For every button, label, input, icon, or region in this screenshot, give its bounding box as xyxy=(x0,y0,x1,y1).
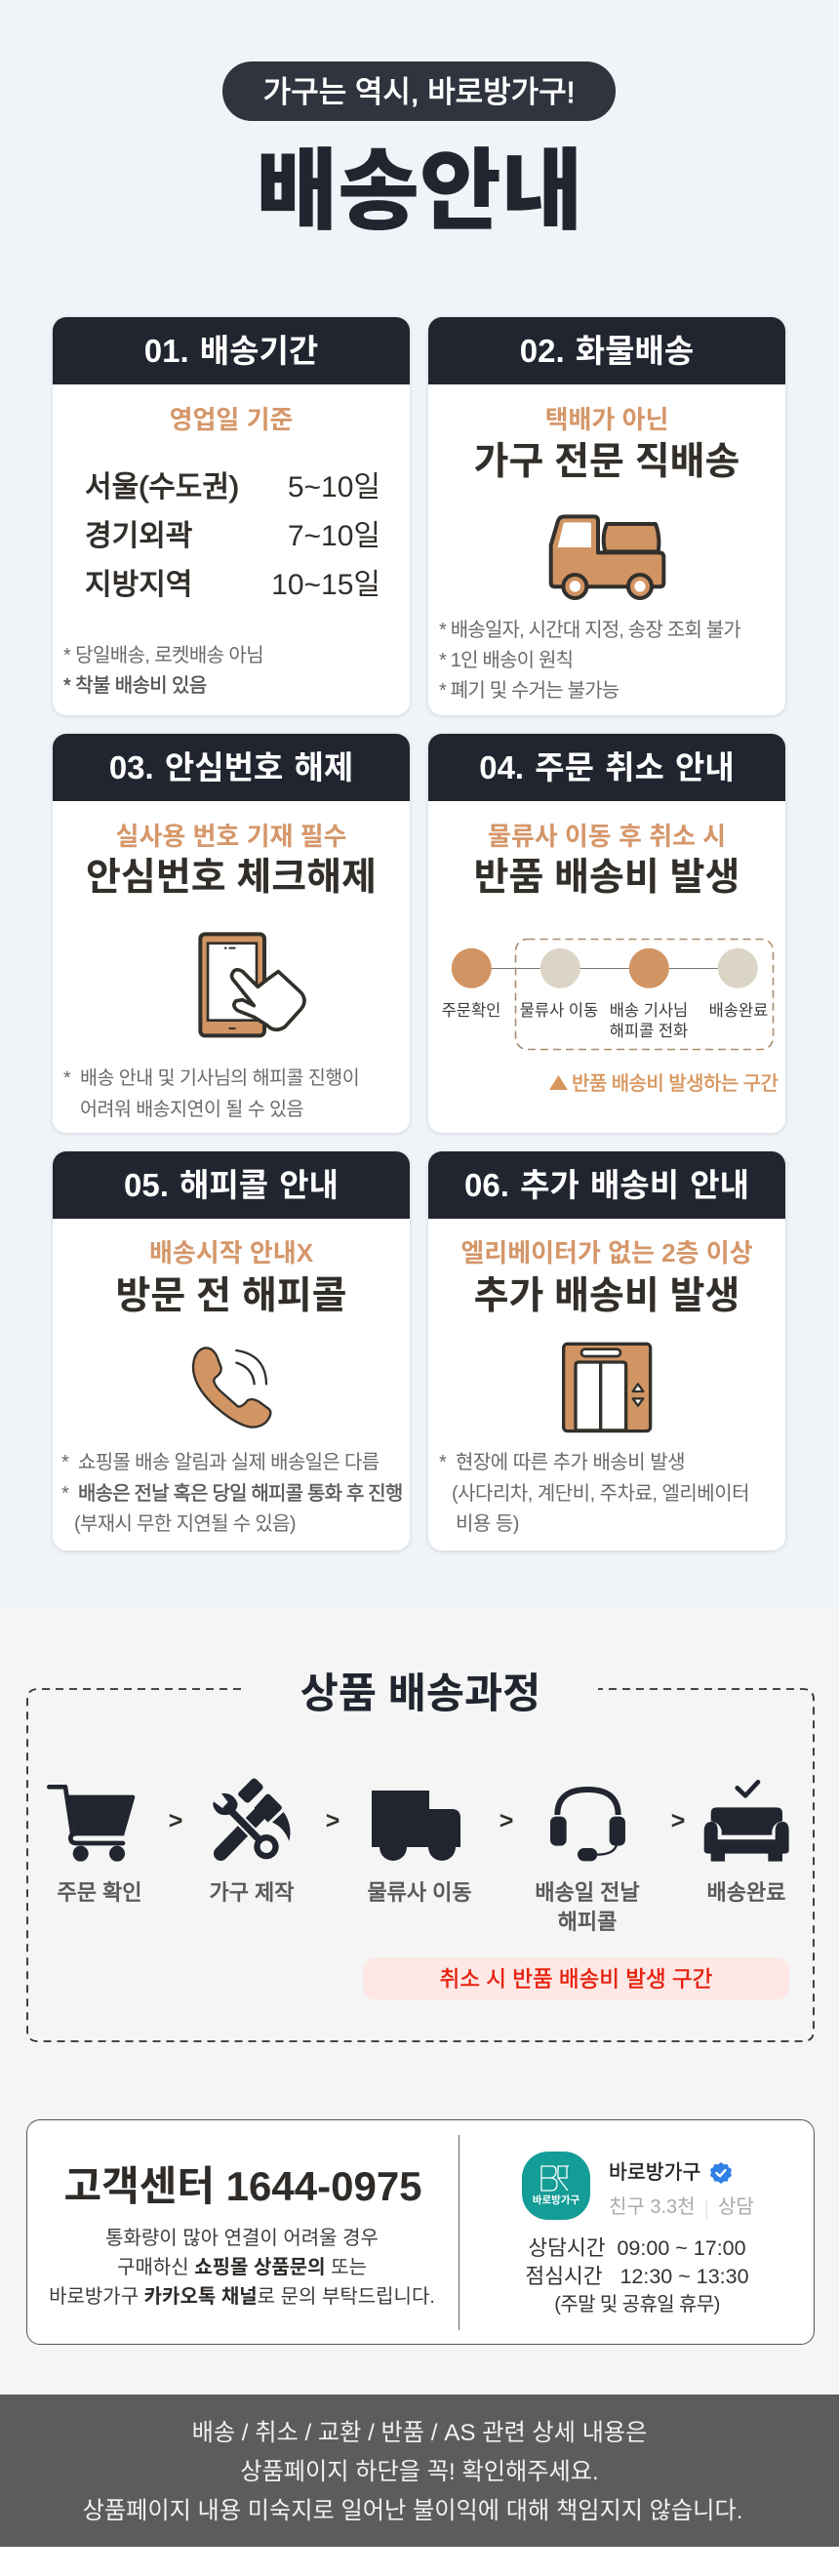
panel: 05 happy call: * xyxy=(61,1452,68,1473)
notes: * 착불 배송비 있음 xyxy=(63,675,207,697)
main heading: 반품 배송비 발생 xyxy=(474,857,739,899)
panel header xyxy=(428,734,785,801)
subheading: 택배가 아닌 xyxy=(545,405,668,434)
panel: 03 safe number xyxy=(53,734,410,1133)
notes: 배송은 전날 혹은 당일 해피콜 통화 후 진행 xyxy=(78,1483,402,1505)
subheading: 배송시작 안내X xyxy=(149,1238,313,1268)
step label: 물류사 이동 xyxy=(367,1880,472,1905)
subheading: 물류사 이동 후 취소 시 xyxy=(488,822,726,851)
logo xyxy=(522,2152,590,2220)
opening hours: (주말 및 공휴일 휴무) xyxy=(554,2294,720,2315)
tagline pill xyxy=(222,61,616,121)
subheading: 엘리베이터가 없는 2층 이상 xyxy=(460,1238,753,1268)
channel stats: 상담 xyxy=(718,2196,754,2218)
step label xyxy=(535,1880,640,1934)
notes xyxy=(63,1067,359,1120)
panel: 04 order cancellation xyxy=(428,734,785,1133)
panel: 02 freight delivery xyxy=(428,317,785,715)
inquiry text xyxy=(49,2228,435,2308)
panel header: 05. 해피콜 안내 xyxy=(124,1167,339,1203)
stepper diagram: 해피콜 전화 xyxy=(610,1022,688,1040)
panel: 03 safe number: * xyxy=(63,1067,70,1089)
region row: Seoul xyxy=(85,471,380,503)
region row: provinces: 지방지역 xyxy=(85,569,192,601)
notes: 배송 안내 및 기사님의 해피콜 진행이 xyxy=(80,1067,359,1089)
section: delivery process xyxy=(26,1671,815,2042)
notes: * 당일배송, 로켓배송 아님 xyxy=(63,645,263,666)
tagline pill: 가구는 역시, 바로방가구! xyxy=(263,75,575,109)
opening hours xyxy=(525,2236,749,2315)
main heading: 방문 전 해피콜 xyxy=(116,1275,346,1317)
notice text xyxy=(83,2420,742,2524)
panel header: 06. 추가 배송비 안내 xyxy=(464,1167,749,1203)
region row: Gyeonggi xyxy=(85,520,380,552)
step label: 주문 확인 xyxy=(57,1880,142,1905)
icon: headset xyxy=(550,1787,625,1862)
icon: triangle xyxy=(549,1075,568,1090)
logo: 바로방가구 xyxy=(533,2194,579,2206)
region row: Seoul: 5~10일 xyxy=(288,471,380,503)
stepper diagram xyxy=(442,939,775,1050)
arrow: > xyxy=(671,1807,685,1834)
notice text: 상품페이지 내용 미숙지로 일어난 불이익에 대해 책임지지 않습니다. xyxy=(83,2498,742,2524)
icon: truck xyxy=(548,514,665,600)
notice text: 배송 / 취소 / 교환 / 반품 / AS 관련 상세 내용은 xyxy=(192,2420,647,2446)
region row: provinces xyxy=(85,569,380,601)
notes: 현장에 따른 추가 배송비 발생 xyxy=(456,1452,685,1473)
notes: (부재시 무한 지연될 수 있음) xyxy=(74,1513,296,1535)
bottom white strip xyxy=(0,2547,839,2576)
icon: cart xyxy=(47,1785,135,1862)
region row: Seoul: 서울(수도권) xyxy=(85,471,239,503)
notes: * 배송일자, 시간대 지정, 송장 조회 불가 xyxy=(439,620,740,641)
step label: 해피콜 xyxy=(558,1910,617,1934)
warning caption: 반품 배송비 발생하는 구간 xyxy=(572,1073,778,1095)
icon: tools xyxy=(213,1778,291,1861)
notes xyxy=(61,1452,402,1535)
panel: 06 extra fee xyxy=(428,1151,785,1550)
main heading: 추가 배송비 발생 xyxy=(474,1275,739,1317)
region row: Gyeonggi: 7~10일 xyxy=(288,520,380,552)
panel header: 02. 화물배송 xyxy=(520,333,694,369)
notes xyxy=(63,645,263,697)
step label: 배송완료 xyxy=(707,1880,785,1905)
icon: phone with hand xyxy=(198,932,306,1038)
inquiry text: 통화량이 많아 연결이 어려울 경우 xyxy=(105,2228,379,2249)
channel stats xyxy=(609,2196,754,2219)
stepper diagram: 배송 기사님 xyxy=(610,1001,688,1020)
icon: delivery truck xyxy=(372,1791,460,1861)
step label: 가구 제작 xyxy=(209,1880,295,1905)
panel header xyxy=(53,1151,410,1219)
section heading: 상품 배송과정 xyxy=(300,1671,540,1717)
main heading: 안심번호 체크해제 xyxy=(86,857,377,899)
opening hours: 상담시간 09:00 ~ 17:00 xyxy=(528,2236,746,2260)
notes: * 1인 배송이 원칙 xyxy=(439,650,573,671)
notes xyxy=(439,620,741,702)
subheading: 영업일 기준 xyxy=(170,405,293,434)
region row: provinces: 10~15일 xyxy=(271,569,380,601)
callout: 취소 시 반품 배송비 발생 구간 xyxy=(440,1967,712,1992)
panel: customer center xyxy=(26,2119,815,2345)
panel header: 03. 안심번호 해제 xyxy=(109,749,353,785)
notes: 쇼핑몰 배송 알림과 실제 배송일은 다름 xyxy=(78,1452,380,1473)
panel: 05 happy call: * xyxy=(61,1483,68,1505)
subheading: 실사용 번호 기재 필수 xyxy=(116,822,346,851)
panel header: 04. 주문 취소 안내 xyxy=(479,749,735,785)
heading: 고객센터 1644-0975 xyxy=(63,2163,422,2209)
notes: 비용 등) xyxy=(456,1513,519,1535)
panel: 06 extra fee: * xyxy=(439,1452,446,1473)
notes: * 폐기 및 수거는 불가능 xyxy=(439,680,619,702)
stepper diagram: 물류사 이동 xyxy=(520,1001,598,1020)
panel: 05 happy call xyxy=(53,1151,410,1550)
arrow: > xyxy=(169,1807,182,1834)
notice text: 상품페이지 하단을 꼭! 확인해주세요. xyxy=(240,2459,599,2485)
main heading: 가구 전문 직배송 xyxy=(474,441,739,483)
notes: 어려워 배송지연이 될 수 있음 xyxy=(80,1099,303,1120)
panel header xyxy=(53,317,410,384)
footer notice xyxy=(0,2395,839,2547)
title: 배송안내 xyxy=(257,142,582,241)
inquiry text: 구매하신 쇼핑몰 상품문의 또는 xyxy=(117,2257,367,2278)
icon: telephone xyxy=(191,1347,271,1429)
icon: sofa with check xyxy=(704,1780,789,1862)
arrow: > xyxy=(499,1807,513,1834)
stepper diagram: 배송완료 xyxy=(709,1001,768,1020)
panel: 01 delivery period xyxy=(53,317,410,715)
inquiry text: 바로방가구 카카오톡 채널로 문의 부탁드립니다. xyxy=(49,2286,435,2308)
channel name: 바로방가구 xyxy=(609,2161,700,2184)
channel stats: 친구 3.3천 xyxy=(609,2196,696,2218)
opening hours: 점심시간 12:30 ~ 13:30 xyxy=(525,2264,749,2287)
panel header xyxy=(428,317,785,384)
stepper diagram: 주문확인 xyxy=(442,1001,500,1020)
panel header: 01. 배송기간 xyxy=(144,333,318,369)
region row: Gyeonggi: 경기외곽 xyxy=(85,520,192,552)
panel header xyxy=(428,1151,785,1219)
callout xyxy=(363,1957,789,2000)
notes xyxy=(439,1452,749,1535)
icon: verified badge xyxy=(710,2162,732,2184)
step label: 배송일 전날 xyxy=(535,1880,640,1905)
icon: elevator xyxy=(562,1343,652,1432)
arrow: > xyxy=(326,1807,340,1834)
panel header xyxy=(53,734,410,801)
notes: (사다리차, 계단비, 주차료, 엘리베이터 xyxy=(452,1483,749,1505)
